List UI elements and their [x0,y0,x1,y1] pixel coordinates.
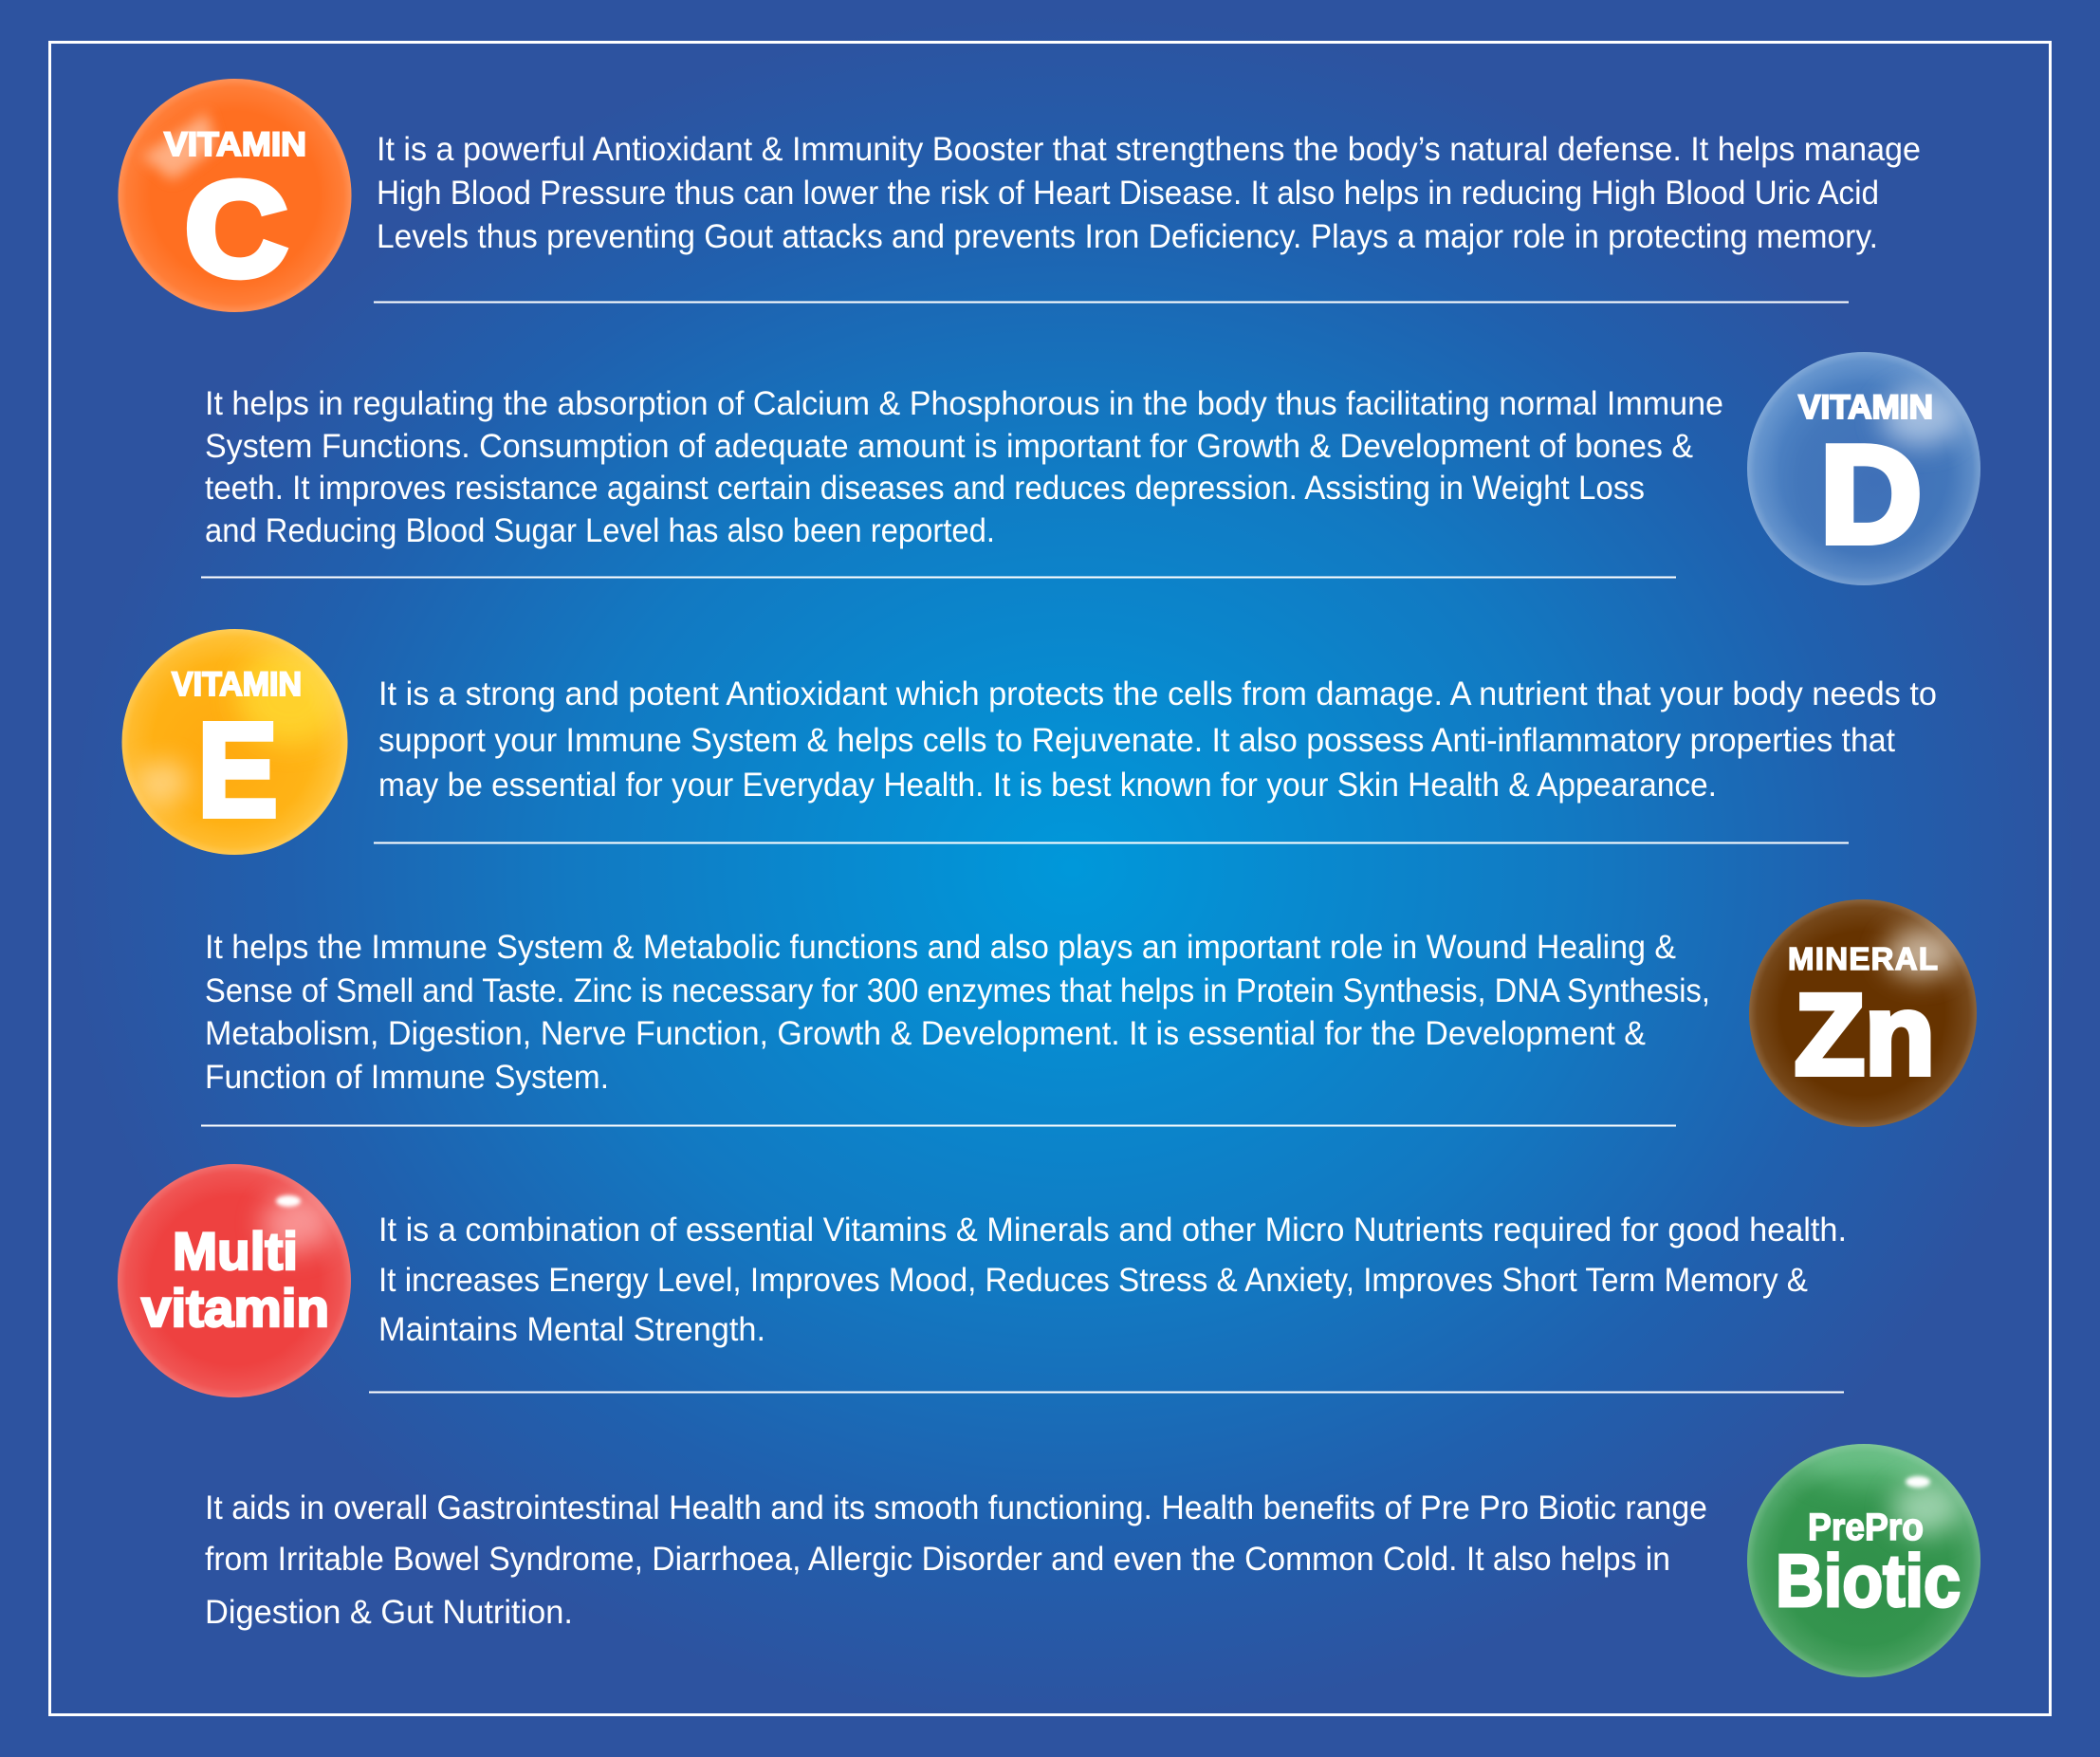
icon: vitamin E sphere [121,629,347,855]
text: vitamin D description: System Functions. Consumption of adequate amount is important for Growth & Development of bones & [205,428,1693,465]
text: vitamin C description: It is a powerful Antioxidant & Immunity Booster that strengthens the body’s natural defense. It helps manage [377,131,1921,168]
text: vitamin D description: teeth. It improves resistance against certain diseases and reduces depression. Assisting in Weight Loss [205,470,1645,507]
text: prepro biotic description: from Irritable Bowel Syndrome, Diarrhoea, Allergic Disorder and even the Common Cold. It also helps in [205,1541,1670,1578]
text: vitamin E description: support your Immune System & helps cells to Rejuvenate. It also possess Anti-inflammatory properties that [378,722,1895,759]
text: vitamin D description: and Reducing Blood Sugar Level has also been reported. [205,512,995,549]
panel: mineral zinc [201,899,1977,1127]
text: mineral zinc description: Sense of Smell and Taste. Zinc is necessary for 300 enzymes that helps in Protein Synthesis, DNA Synthesis, [205,972,1710,1009]
text: vitamin C description: Levels thus preventing Gout attacks and prevents Iron Deficiency. Plays a major role in protecting memory. [377,218,1878,255]
icon: prepro biotic sphere: PrePro [1808,1507,1924,1548]
text: mineral zinc description: Function of Immune System. [205,1059,609,1096]
panel: vitamin D [201,352,1980,585]
panel: vitamin C [118,79,1921,312]
text: mineral zinc description: It helps the Immune System & Metabolic functions and also plays an important role in Wound Healing & [205,929,1676,966]
icon: vitamin C sphere [118,79,351,312]
text: vitamin C description: High Blood Pressure thus can lower the risk of Heart Disease. It also helps in reducing High Blood Uric Acid [377,175,1879,212]
text: vitamin E description: may be essential for your Everyday Health. It is best known for your Skin Health & Appearance. [378,767,1717,804]
text: vitamin D description [205,385,1723,549]
text: prepro biotic description [205,1489,1707,1631]
icon: vitamin C sphere: VITAMIN [164,126,306,163]
icon: multivitamin sphere: Multi [173,1221,298,1281]
text: vitamin D description: It helps in regulating the absorption of Calcium & Phosphorous in the body thus facilitating normal Immune [205,385,1723,422]
icon: multivitamin sphere [118,1164,351,1397]
text: vitamin E description: It is a strong and potent Antioxidant which protects the cells from damage. A nutrient that your body needs to [378,675,1937,712]
text: mineral zinc description: Metabolism, Digestion, Nerve Function, Growth & Development. It is essential for the Development & [205,1015,1646,1052]
icon: vitamin C sphere: C [185,154,287,304]
text: mineral zinc description [205,929,1710,1096]
panel: prepro biotic [205,1434,1980,1677]
text: multivitamin description: It is a combination of essential Vitamins & Minerals and other Micro Nutrients required for good health. [378,1211,1847,1248]
icon: vitamin D sphere: D [1820,417,1922,571]
panel: vitamin E [121,629,1937,855]
icon: vitamin E sphere: E [197,694,278,844]
icon: mineral Zn sphere: MINERAL [1788,941,1938,976]
icon: mineral Zn sphere [1749,899,1977,1127]
icon: vitamin D sphere: VITAMIN [1798,389,1933,426]
icon: mineral Zn sphere: Zn [1795,970,1935,1099]
icon: vitamin D sphere [1747,352,1980,585]
panel: multivitamin [118,1164,1847,1397]
text: multivitamin description: It increases Energy Level, Improves Mood, Reduces Stress & Anxiety, Improves Short Term Memory & [378,1262,1808,1299]
text: prepro biotic description: Digestion & Gut Nutrition. [205,1594,573,1631]
text: multivitamin description [378,1211,1847,1348]
icon: prepro biotic sphere [1747,1434,1980,1677]
icon: prepro biotic sphere: Biotic [1776,1539,1961,1622]
text: vitamin C description [377,131,1921,255]
text: prepro biotic description: It aids in overall Gastrointestinal Health and its smooth functioning. Health benefits of Pre Pro Biotic range [205,1489,1707,1526]
text: multivitamin description: Maintains Mental Strength. [378,1311,765,1348]
text: vitamin E description [378,675,1937,804]
icon: multivitamin sphere: vitamin [141,1278,329,1338]
icon: vitamin E sphere: VITAMIN [172,666,302,703]
